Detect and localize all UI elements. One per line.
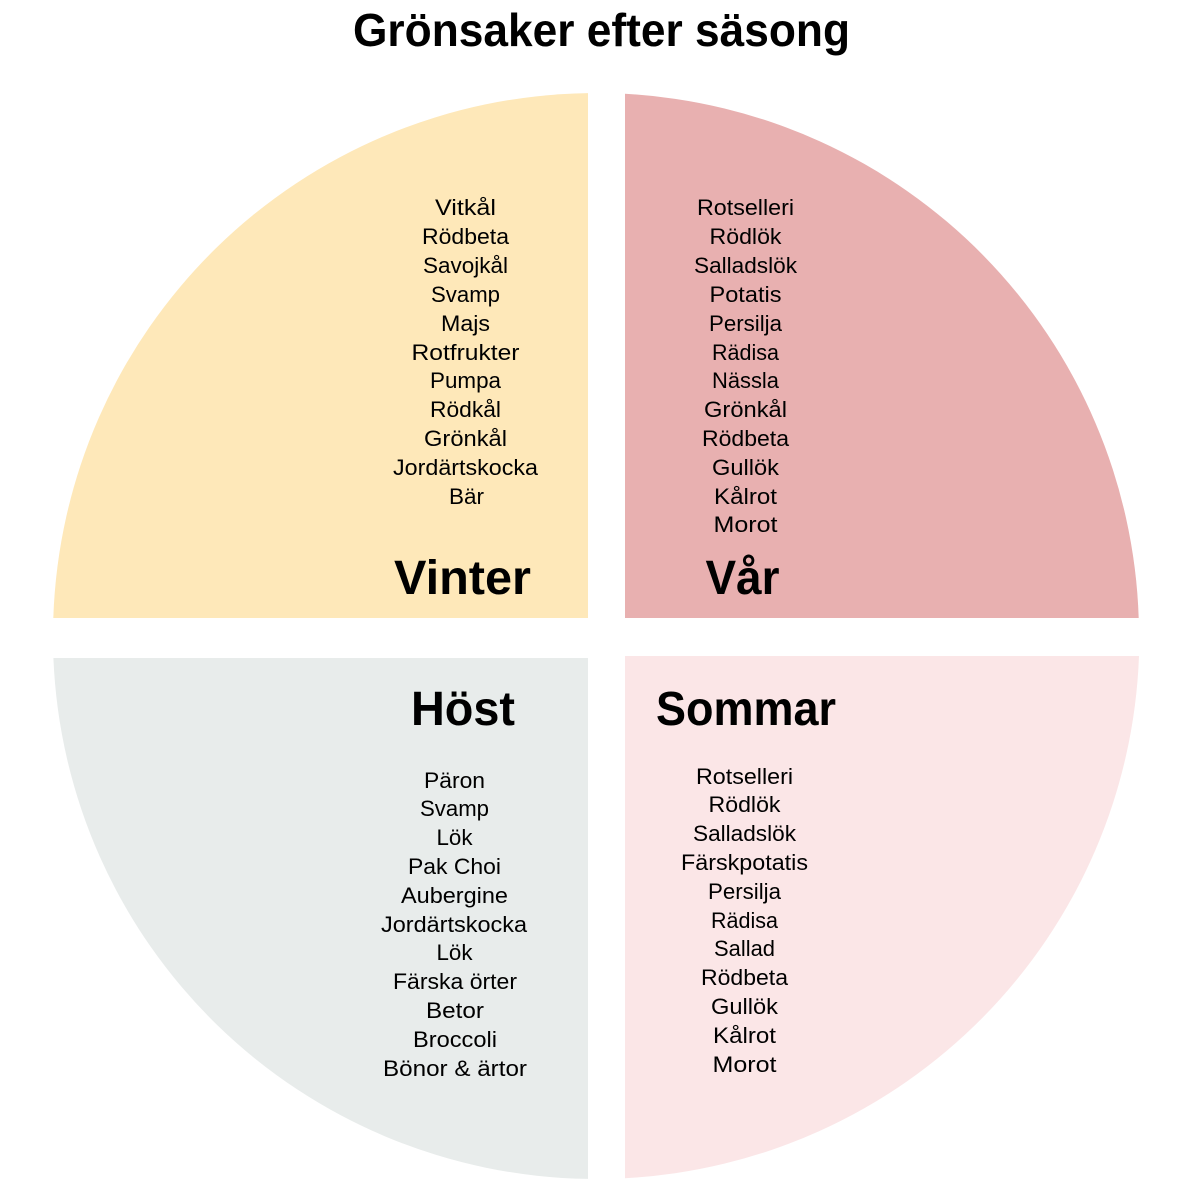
list: Vinter: Vitkål (435, 195, 496, 220)
list: Sommar: Gullök (711, 994, 779, 1019)
list: Vinter: Jordärtskocka (393, 455, 538, 480)
list: Höst: Lök (436, 940, 473, 965)
list: Vår: Rotselleri (697, 195, 794, 220)
list: Vår: Grönkål (704, 397, 787, 422)
list: Vinter: Pumpa (430, 368, 501, 393)
panel: Vinter (53, 93, 588, 618)
list: Sommar: Färskpotatis (681, 850, 808, 875)
list: Höst: Päron (424, 768, 485, 793)
list: Höst (381, 768, 528, 1081)
list: Vår: Rödlök (710, 224, 782, 249)
heading: Vinter: Vinter (394, 552, 531, 605)
quadrant: Vår (625, 94, 1139, 618)
list: Höst: Lök (436, 825, 473, 850)
list: Vår: Nässla (712, 368, 779, 393)
list: Vår: Rödbeta (702, 426, 789, 451)
panel: Höst (53, 658, 588, 1179)
list: Vinter: Rotfrukter (412, 340, 520, 365)
heading: Sommar: Sommar (656, 683, 836, 736)
list: Vinter: Rödkål (430, 397, 501, 422)
list: Sommar: Rödlök (708, 792, 781, 817)
list: Vår: Salladslök (694, 253, 798, 278)
list: Sommar (681, 764, 808, 1077)
list: Sommar: Rödbeta (701, 965, 788, 990)
list: Sommar: Persilja (708, 879, 781, 904)
list: Höst: Svamp (420, 796, 489, 821)
list: Vår: Persilja (709, 311, 782, 336)
list: Vinter (393, 195, 538, 509)
panel: Sommar (625, 656, 1139, 1178)
quadrant: Höst (53, 658, 588, 1179)
list: Vinter: Rödbeta (422, 224, 509, 249)
list: Höst: Färska örter (393, 969, 518, 994)
list: Vår: Morot (714, 512, 778, 537)
list: Höst: Betor (426, 998, 485, 1023)
list: Vår: Rädisa (712, 340, 779, 365)
list: Höst: Broccoli (413, 1027, 497, 1052)
title: Grönsaker efter säsong (353, 4, 850, 56)
list: Sommar: Rädisa (711, 908, 778, 933)
list: Sommar: Kålrot (713, 1023, 777, 1048)
list: Vår: Kålrot (714, 484, 778, 509)
list: Höst: Jordärtskocka (381, 912, 527, 937)
quadrant: Vinter (53, 93, 588, 618)
list: Sommar: Salladslök (693, 821, 797, 846)
list: Vinter: Svamp (431, 282, 500, 307)
list: Sommar: Rotselleri (696, 764, 793, 789)
heading: Höst: Höst (411, 683, 515, 736)
heading: Vår: Vår (706, 552, 780, 605)
quadrant: Sommar (625, 656, 1139, 1178)
list: Sommar: Sallad (714, 936, 775, 961)
list: Vår: Gullök (712, 455, 780, 480)
list: Vinter: Savojkål (423, 253, 508, 278)
list: Höst: Pak Choi (408, 854, 501, 879)
list: Vinter: Bär (449, 484, 485, 509)
list: Höst: Bönor & ärtor (383, 1056, 528, 1081)
list: Vår: Potatis (710, 282, 782, 307)
list: Vinter: Majs (441, 311, 490, 336)
list: Höst: Aubergine (401, 883, 508, 908)
list: Sommar: Morot (712, 1052, 777, 1077)
list: Vår (694, 195, 798, 537)
list: Vinter: Grönkål (424, 426, 507, 451)
panel: Vår (625, 94, 1139, 618)
